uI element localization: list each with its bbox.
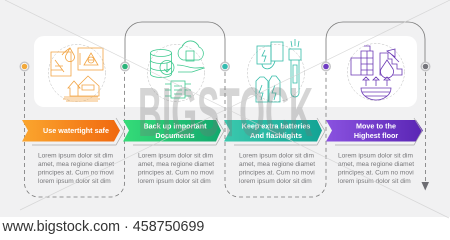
text block 3: principes at. Cum no movi [239,170,315,176]
icon nodes [20,62,430,71]
text block 4: principes at. Cum no movi [338,170,414,176]
banner: highest floor: Highest floor [354,131,398,140]
banner: batteries: Keep extra batteries [242,122,310,130]
text block 3: lorem ipsum dolor sit dim [239,178,312,185]
connector lines [24,22,426,197]
text block 4: Lorem ipsum dolor sit dim [338,152,413,160]
text block 4: lorem ipsum dolor sit dim [338,178,411,185]
text block 3: amet, mea regione diamet [239,161,315,168]
text block 1: lorem ipsum dolor sit dim [38,178,111,185]
text block 1: amet, mea regione diamet [38,161,114,168]
text block 3 [239,152,315,185]
text block 2: amet, mea regione diamet [138,161,214,168]
banner: back up documents: Documents [155,131,195,140]
text block 3: Lorem ipsum dolor sit dim [239,152,314,160]
banner: back up documents: Back up important [143,122,207,130]
text block 2 [138,152,214,185]
text block 2: Lorem ipsum dolor sit dim [138,152,213,160]
banner: highest floor: Move to the [356,122,396,130]
text block 4 [338,152,414,185]
banner: batteries: And flashlights [250,131,302,140]
text block 4: amet, mea regione diamet [338,161,414,168]
banner: use watertight safe [22,118,124,145]
text block 2: principes at. Cum no movi [138,170,214,176]
text block 1: Lorem ipsum dolor sit dim [38,152,113,160]
icon: batteries and flashlights [248,39,304,102]
banner: use watertight safe: Use watertight safe [43,126,109,135]
banner: highest floor [326,118,423,145]
banner: batteries [224,118,325,145]
icon: watertight safe [48,44,106,102]
text block 1 [38,152,114,185]
icon: back up documents [148,41,204,102]
white icon panel [34,36,417,107]
arrowhead [422,182,429,190]
source caption: www.bigstock.com · 458750699 [2,219,204,235]
icon: highest floor [348,44,404,100]
text block 2: lorem ipsum dolor sit dim [138,178,211,185]
text block 1: principes at. Cum no movi [38,170,114,176]
banner: back up documents [123,118,224,145]
